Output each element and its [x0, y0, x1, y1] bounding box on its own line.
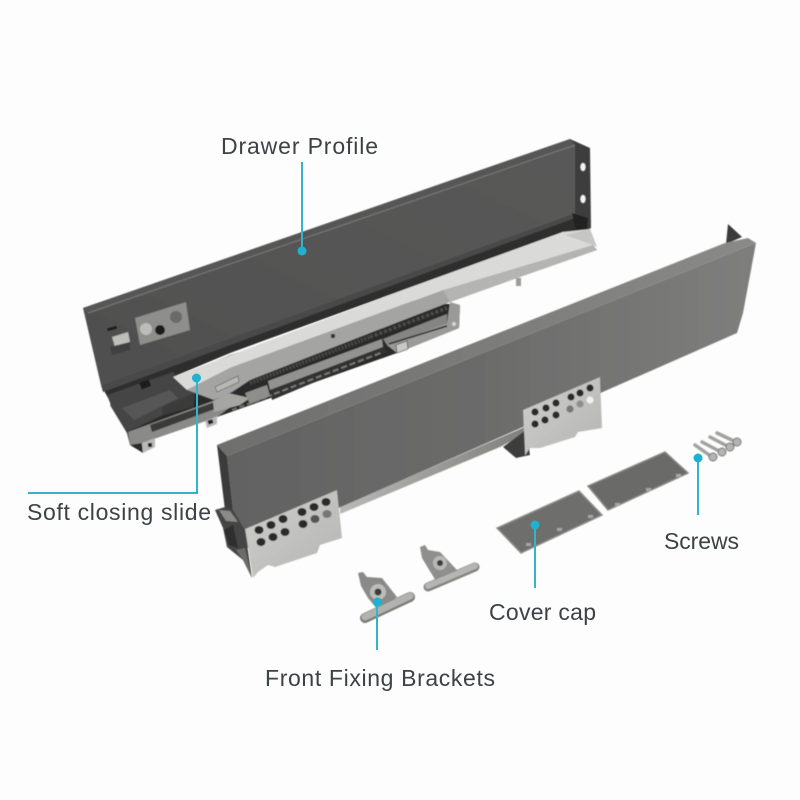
end block — [215, 507, 252, 578]
label: Front Fixing Brackets: Front Fixing Brackets — [265, 665, 495, 691]
bottom wedge strip — [340, 427, 528, 514]
main face — [83, 139, 575, 385]
damper tube — [268, 339, 383, 390]
screws — [695, 433, 741, 461]
leader: Front Fixing Brackets — [373, 598, 382, 650]
leader: Soft closing slide — [28, 374, 201, 493]
cover caps — [497, 452, 688, 553]
mid face of slide — [187, 245, 597, 400]
metal base band — [128, 394, 240, 445]
drawer profile: right cover panel — [215, 224, 756, 578]
mounting bracket: rear — [523, 377, 602, 456]
rack — [250, 337, 370, 383]
rear flange — [570, 139, 591, 235]
panel inner end — [726, 224, 742, 244]
panel end edge — [217, 445, 233, 510]
dark channel — [101, 213, 578, 398]
label: Soft closing slide: Soft closing slide — [27, 499, 211, 525]
slide tab — [516, 278, 521, 286]
base tabs — [142, 438, 155, 453]
leader: Cover cap — [530, 520, 540, 588]
front plate — [107, 372, 195, 432]
label: Screws: Screws — [664, 528, 739, 554]
end gear detail — [213, 393, 250, 412]
slide top strip — [173, 229, 597, 390]
label: Drawer Profile: Drawer Profile — [221, 133, 378, 159]
leader: Drawer Profile — [298, 162, 306, 256]
panel top band — [217, 238, 756, 456]
mounting bracket: front — [245, 490, 342, 578]
front fixing bracket: right — [420, 545, 475, 587]
label: Cover cap: Cover cap — [489, 599, 596, 625]
dark bracket block — [503, 430, 530, 458]
rear plate — [387, 302, 460, 353]
panel face — [227, 243, 756, 549]
drawer profile: left assembled runner — [83, 139, 597, 453]
leader: Screws — [694, 454, 702, 515]
front fixing bracket: left — [358, 572, 410, 618]
lower mechanism body — [110, 300, 460, 453]
window in face — [135, 302, 190, 345]
